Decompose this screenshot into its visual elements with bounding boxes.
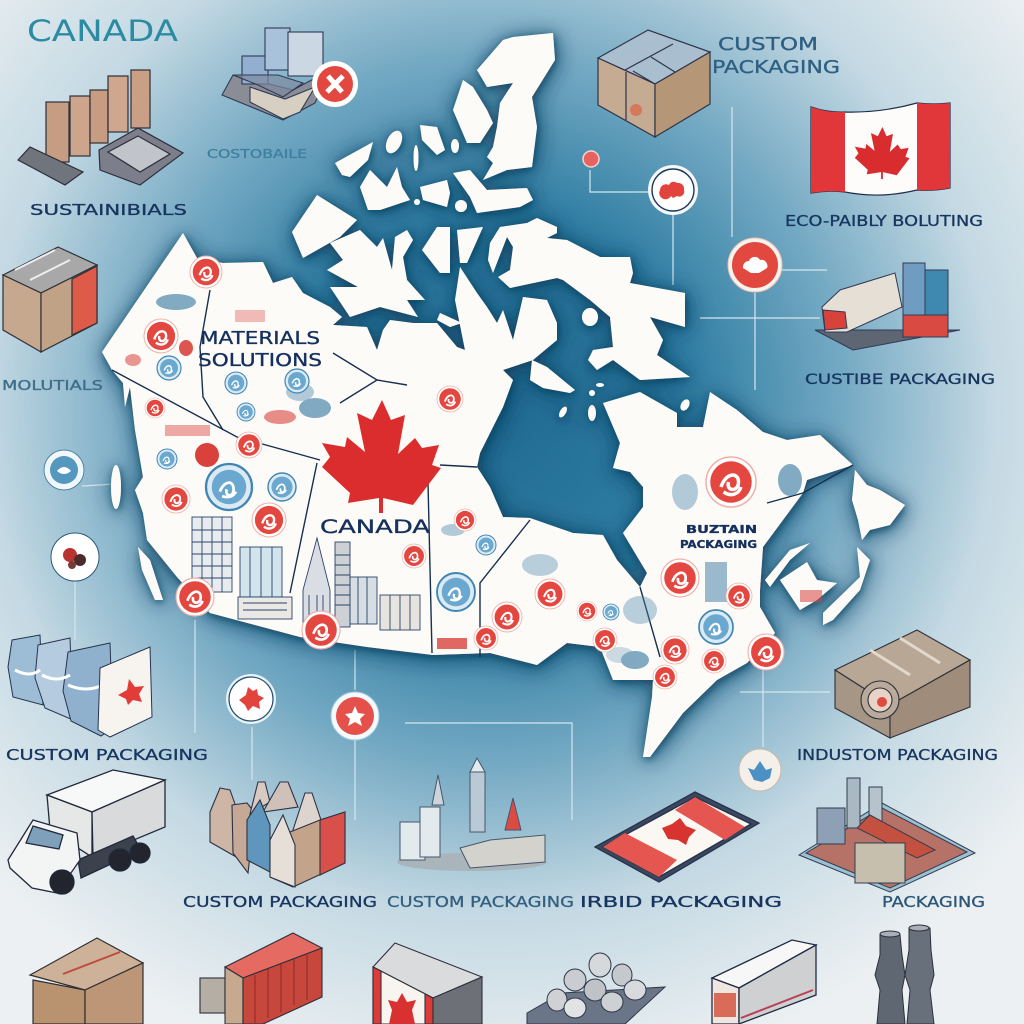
text labels: CUSTIBE PACKAGING [805, 372, 995, 388]
marker: blue bottom [739, 749, 781, 791]
marker: flake 2 [728, 238, 782, 292]
icon: truck [8, 770, 165, 894]
map labels: PACKAGING [680, 538, 757, 551]
text labels: IRBID PACKAGING [580, 893, 782, 911]
map markers [125, 256, 822, 689]
connector lines [75, 107, 830, 820]
text labels: INDUSTOM PACKAGING [797, 746, 998, 764]
text labels: COSTOBAILE [207, 147, 307, 161]
map labels [198, 328, 757, 551]
maple leaf [322, 400, 441, 513]
landmass [102, 33, 905, 757]
icon: custom box [598, 30, 710, 137]
icon: flag tray [595, 792, 759, 882]
icon: tall bottles [875, 925, 934, 1024]
icon: trailer [712, 940, 816, 1024]
marker: flake 1 [648, 165, 698, 215]
text labels: ECO-PAIBLY BOLUTING [785, 212, 983, 230]
icon: factory [799, 778, 975, 892]
icon: stacked boxes [222, 28, 330, 120]
outside markers [44, 151, 782, 791]
marker: flake 3 [226, 674, 276, 724]
icon: container [200, 933, 322, 1024]
icon: bottles [210, 782, 345, 887]
icon: rocks tray [527, 953, 665, 1024]
map labels: BUZTAIN [686, 523, 757, 536]
icon: box right [835, 630, 970, 738]
icon: bags [8, 635, 152, 737]
icon: brown box left [3, 247, 97, 352]
icon: city [397, 758, 547, 871]
text labels: CUSTOM PACKAGING [6, 746, 208, 764]
map labels: CANADA [320, 516, 430, 538]
icon: columns and tray [18, 70, 183, 185]
marker: blue left [44, 450, 84, 490]
text labels: PACKAGING [882, 893, 985, 911]
skyline on map [192, 517, 420, 630]
title: CANADA [27, 14, 178, 48]
text labels: CUSTOM PACKAGING [183, 893, 377, 911]
text labels: CUSTOM [718, 34, 818, 55]
marker: dark left [51, 533, 99, 581]
text labels: MOLUTIALS [2, 379, 103, 394]
marker: top icon [312, 61, 358, 107]
province borders [112, 290, 853, 657]
text labels: SUSTAINIBIALS [30, 201, 187, 219]
icon: flag box [373, 943, 482, 1024]
map of Canada [102, 33, 905, 757]
icon: Canadian flag [811, 103, 950, 195]
icon: industrial set [815, 263, 960, 350]
icon: bottom box [30, 938, 143, 1024]
map labels: SOLUTIONS [198, 350, 322, 371]
text labels: CUSTOM PACKAGING [387, 893, 574, 911]
text labels: PACKAGING [712, 57, 840, 78]
marker: star [331, 692, 379, 740]
map labels: MATERIALS [200, 328, 320, 349]
marker: red small [583, 151, 599, 167]
